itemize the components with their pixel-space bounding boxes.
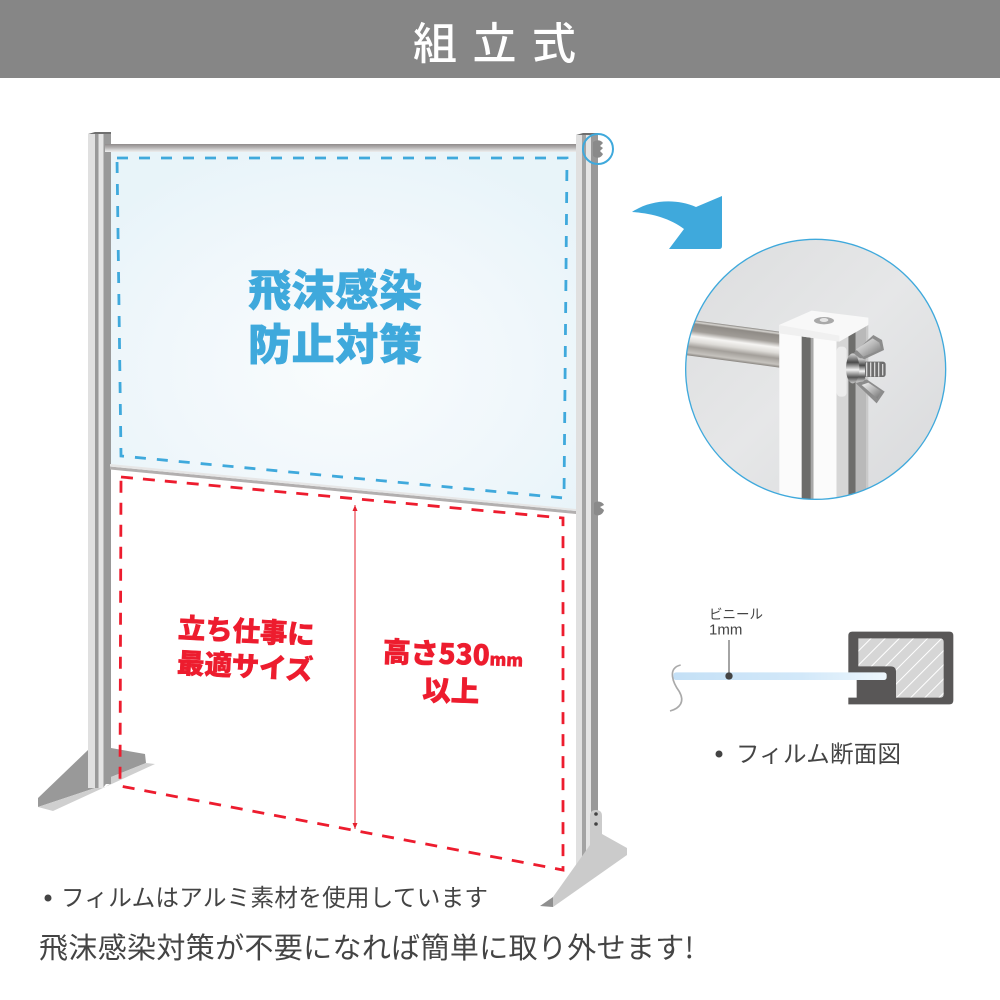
cap bbox=[779, 311, 868, 342]
wing nut: middle bbox=[594, 502, 604, 515]
cross-section label bbox=[709, 603, 763, 638]
right post bbox=[576, 133, 598, 865]
frame hatch bbox=[858, 638, 944, 698]
post side face bbox=[866, 325, 868, 488]
film label: 防止対策 bbox=[248, 311, 422, 373]
film label bbox=[248, 257, 422, 373]
note: removable: 飛沫感染対策が不要になれば簡単に取り外せます! bbox=[39, 925, 694, 967]
label: height bbox=[381, 631, 524, 713]
film panel bbox=[107, 150, 576, 512]
cross-section label: ビニール bbox=[709, 603, 763, 623]
arrow to detail bbox=[632, 196, 722, 249]
film strip bbox=[673, 672, 887, 680]
leader bbox=[727, 640, 731, 676]
cross-section label: 1mm bbox=[709, 622, 742, 638]
height arrow bbox=[354, 505, 356, 829]
header banner bbox=[0, 0, 1000, 78]
top rail bbox=[105, 144, 576, 152]
left post bbox=[88, 132, 111, 788]
product illustration: partition stand bbox=[38, 132, 627, 907]
film label: 飛沫感染 bbox=[248, 257, 422, 319]
highlight circle on bolt bbox=[583, 134, 613, 164]
blue dashed area bbox=[117, 158, 567, 498]
frame bbox=[848, 632, 953, 704]
label: standing work: 立ち仕事に bbox=[177, 605, 316, 653]
right base bbox=[540, 810, 627, 907]
note: film material: フィルムはアルミ素材を使用しています bbox=[61, 879, 488, 913]
label: height: 以上 bbox=[422, 668, 480, 711]
tube bbox=[687, 320, 780, 368]
red dashed area bbox=[120, 477, 563, 870]
detail photo circle bbox=[680, 239, 946, 500]
wing nut bbox=[853, 335, 884, 360]
label: standing work bbox=[175, 605, 316, 688]
cross-section caption: フィルム断面図 bbox=[736, 735, 901, 769]
label: height: 高さ530mm bbox=[382, 631, 524, 676]
label: standing work: 最適サイズ bbox=[176, 641, 315, 688]
cut line bbox=[670, 665, 682, 711]
post front face bbox=[779, 333, 837, 500]
film cross-section diagram bbox=[670, 632, 953, 711]
title: 組立式 bbox=[413, 8, 576, 72]
middle rail bbox=[110, 466, 576, 514]
left base bbox=[38, 748, 155, 811]
